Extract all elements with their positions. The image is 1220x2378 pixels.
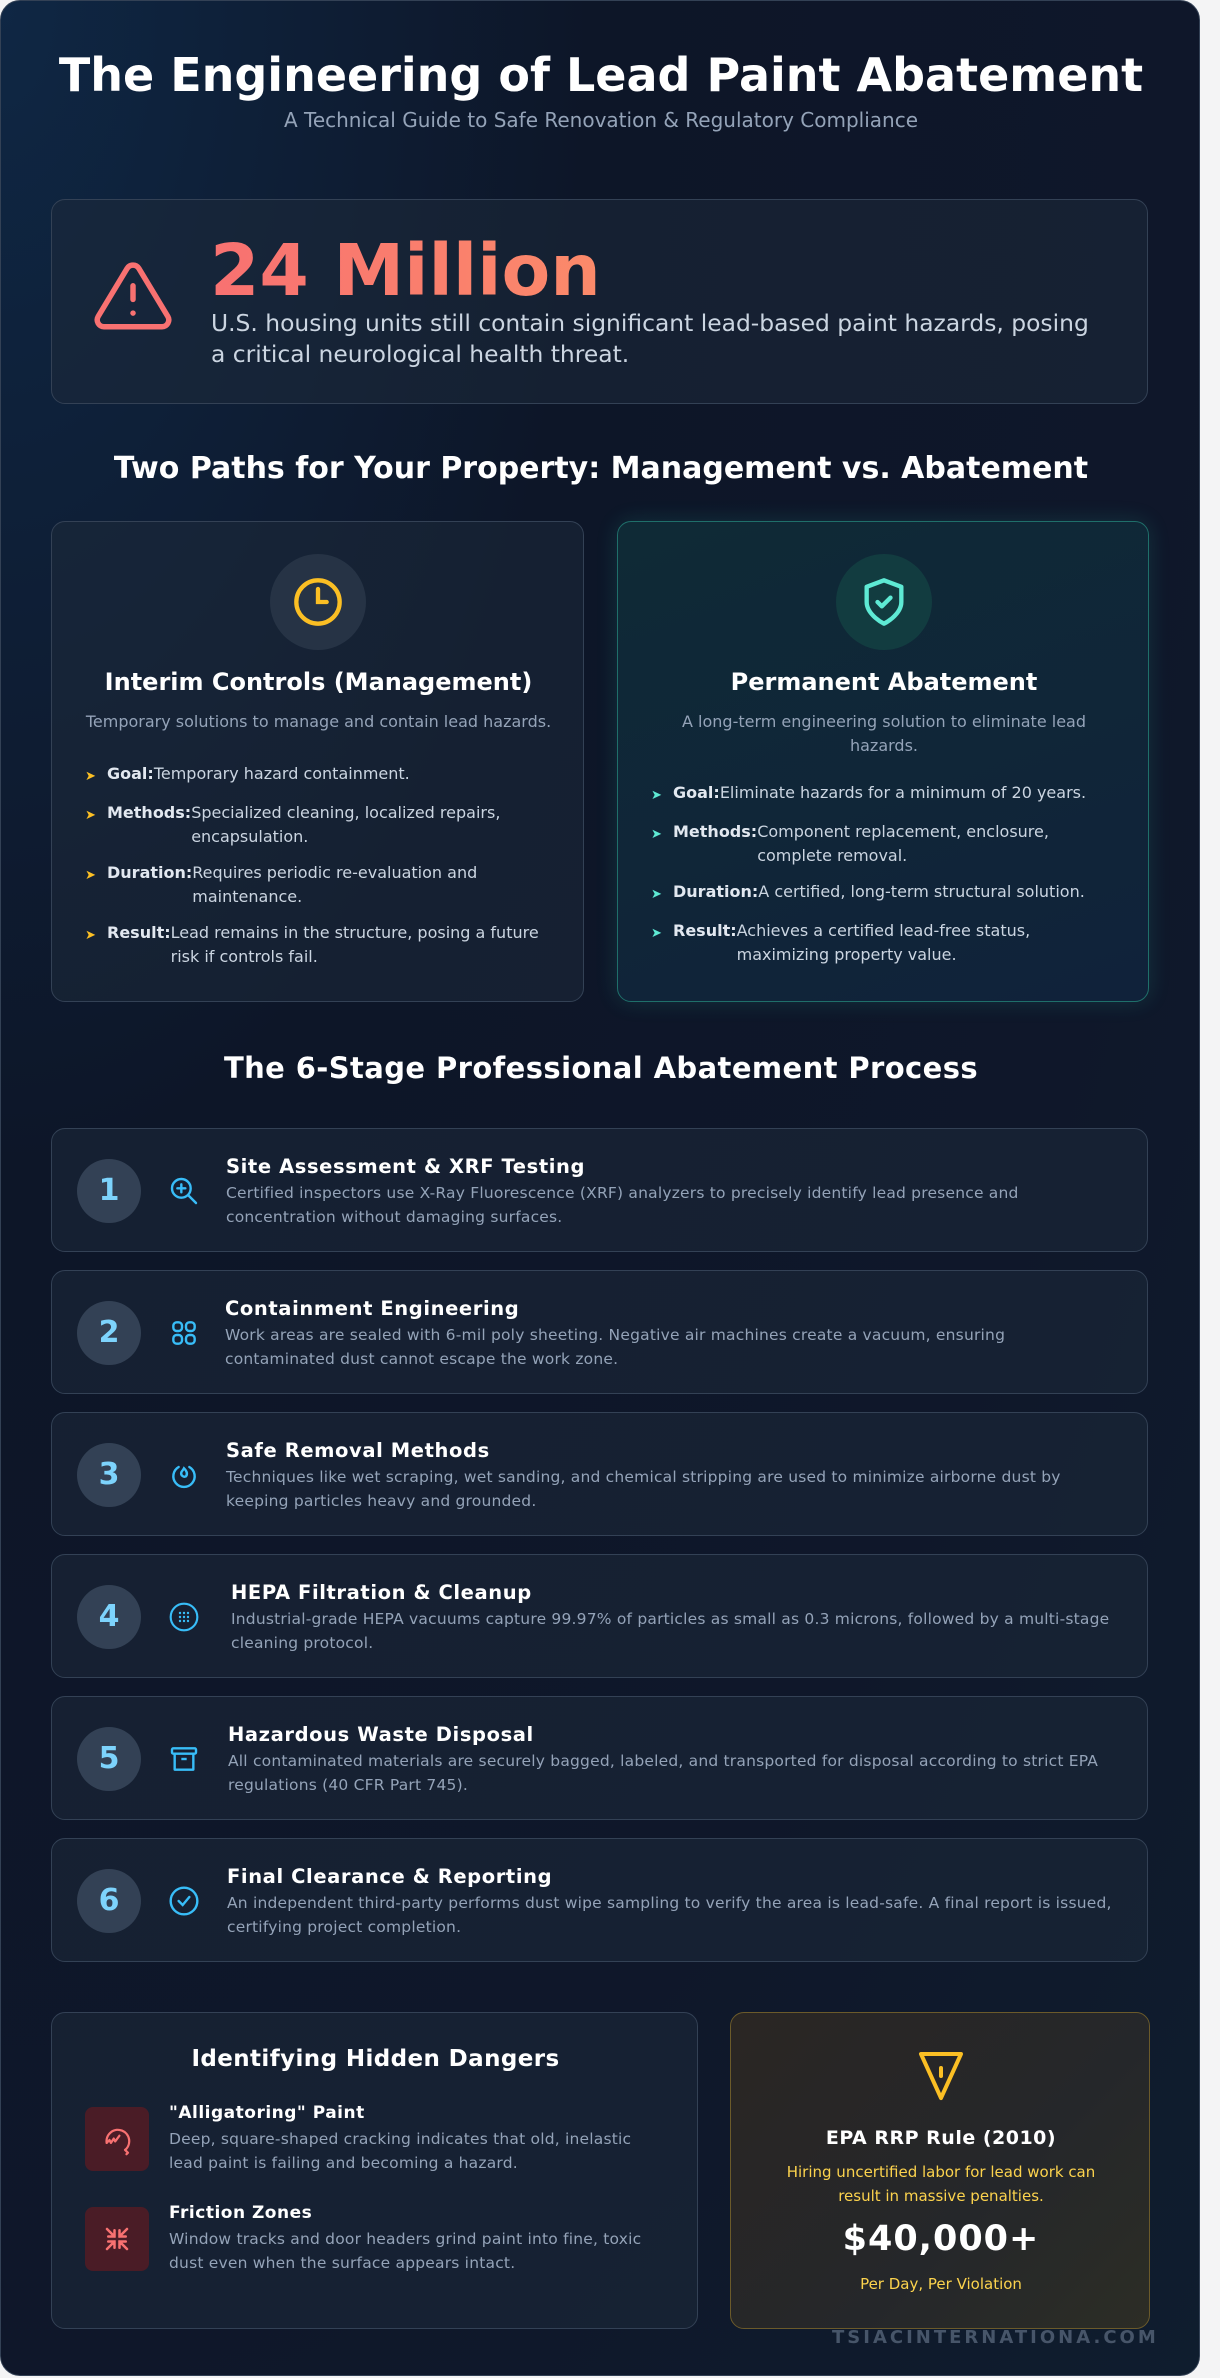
step 4	[51, 1554, 1148, 1678]
list: interim: Lead remains in the structure, posing a future risk if controls fail.	[171, 923, 539, 966]
title: The Engineering of Lead Paint Abatement	[59, 48, 1143, 102]
list: permanent: ➤	[651, 788, 662, 803]
panel: EPA RRP rule	[730, 2012, 1150, 2329]
item: friction zones	[85, 2203, 641, 2272]
penalty figure: $40,000+	[843, 2219, 1039, 2259]
icon: magnifier	[170, 1178, 198, 1204]
card title: Permanent Abatement	[731, 668, 1037, 696]
item: friction zones: Window tracks and door headers grind paint into fine, toxic dust even when the surface appears intact.	[169, 2230, 641, 2272]
icon: arrows in	[85, 2207, 149, 2271]
icon: bin	[170, 1747, 198, 1771]
step 5: Hazardous Waste Disposal	[228, 1723, 534, 1746]
panel: interim controls	[51, 521, 584, 1002]
list: interim: Temporary hazard containment.	[154, 764, 410, 783]
heading: 6-stage process: The 6-Stage Professional Abatement Process	[224, 1051, 978, 1085]
card subtitle: A long-term engineering solution to eliminate lead hazards.	[682, 712, 1086, 755]
list: interim: Methods:	[107, 803, 191, 822]
step 5: 5	[99, 1741, 119, 1776]
list: permanent: Component replacement, enclosure, complete removal.	[757, 822, 1049, 865]
list: permanent	[651, 783, 1086, 964]
step 1: Site Assessment & XRF Testing	[226, 1155, 585, 1178]
step 2: Containment Engineering	[225, 1297, 519, 1320]
list: interim: Duration:	[107, 863, 192, 882]
step 3: 3	[99, 1457, 119, 1492]
step 4: 4	[99, 1599, 119, 1634]
card title: Interim Controls (Management)	[105, 668, 532, 696]
item: alligatoring	[85, 2103, 631, 2172]
list: permanent: Result:	[673, 921, 737, 940]
panel: hidden dangers	[51, 2012, 698, 2329]
step 6: 6	[99, 1883, 119, 1918]
stat description	[211, 309, 1089, 368]
EPA description: Hiring uncertified labor for lead work can	[787, 2163, 1095, 2181]
step 3: Techniques like wet scraping, wet sanding, and chemical stripping are used to minimize airborne dust by keeping particles heavy and grounded.	[226, 1468, 1061, 1510]
step 1	[51, 1128, 1148, 1252]
heading: Identifying Hidden Dangers	[191, 2046, 560, 2072]
list: permanent: Methods:	[673, 822, 757, 841]
step 4: HEPA Filtration & Cleanup	[231, 1581, 532, 1604]
step 2	[51, 1270, 1148, 1394]
list: permanent: Eliminate hazards for a minimum of 20 years.	[720, 783, 1086, 802]
step 3: Safe Removal Methods	[226, 1439, 490, 1462]
step 3	[51, 1412, 1148, 1536]
item: friction zones: Friction Zones	[169, 2203, 312, 2223]
step 6: An independent third-party performs dust wipe sampling to verify the area is lead-safe. A final report is issued, certifying project completion.	[227, 1894, 1112, 1936]
heading: two paths: Two Paths for Your Property: Management vs. Abatement	[114, 451, 1088, 486]
penalty unit: Per Day, Per Violation	[860, 2275, 1022, 2293]
step 1: Certified inspectors use X-Ray Fluorescence (XRF) analyzers to precisely identify lead presence and concentration without damaging surfaces.	[226, 1184, 1019, 1226]
icon: shield	[836, 554, 932, 650]
icon: warning	[94, 262, 172, 330]
list: interim: ➤	[85, 769, 96, 784]
EPA title: EPA RRP Rule (2010)	[826, 2127, 1056, 2149]
step 6: Final Clearance & Reporting	[227, 1865, 552, 1888]
list: permanent: A certified, long-term structural solution.	[758, 882, 1085, 901]
icon: grid	[172, 1321, 196, 1345]
card subtitle: Temporary solutions to manage and contain lead hazards.	[86, 712, 551, 731]
list: permanent: Goal:	[673, 783, 720, 802]
icon: filter	[170, 1602, 198, 1632]
stat number: 24 Million	[210, 229, 601, 312]
list: permanent: ➤	[651, 887, 662, 902]
list: permanent: ➤	[651, 926, 662, 941]
list: interim: Specialized cleaning, localized repairs, encapsulation.	[191, 803, 500, 846]
list: permanent: ➤	[651, 827, 662, 842]
step 5: All contaminated materials are securely bagged, labeled, and transported for disposal according to strict EPA regulations (40 CFR Part 745).	[228, 1752, 1098, 1794]
icon: drop	[172, 1466, 196, 1488]
item: alligatoring: Deep, square-shaped cracking indicates that old, inelastic lead paint is failing and becoming a hazard.	[169, 2130, 631, 2172]
list: interim: ➤	[85, 868, 96, 883]
stat description: U.S. housing units still contain significant lead-based paint hazards, posing	[211, 309, 1089, 337]
list: interim: ➤	[85, 928, 96, 943]
list: interim	[85, 764, 539, 966]
list: interim: Result:	[107, 923, 171, 942]
stat description: a critical neurological health threat.	[211, 340, 629, 368]
EPA description: result in massive penalties.	[838, 2187, 1044, 2205]
step 2: Work areas are sealed with 6-mil poly sheeting. Negative air machines create a vacuum, ensuring contaminated dust cannot escape the work zone.	[225, 1326, 1005, 1368]
watermark: TSIACINTERNATIONA.COM	[832, 2327, 1159, 2348]
icon: warning triangle	[918, 2052, 963, 2100]
panel: stat	[51, 199, 1148, 404]
subtitle: A Technical Guide to Safe Renovation & Regulatory Compliance	[284, 108, 918, 132]
step 4: Industrial-grade HEPA vacuums capture 99.97% of particles as small as 0.3 microns, followed by a multi-stage cleaning protocol.	[231, 1610, 1109, 1652]
step 5	[51, 1696, 1148, 1820]
EPA description	[787, 2163, 1095, 2205]
icon: crack	[85, 2107, 149, 2171]
list: permanent: Achieves a certified lead-free status, maximizing property value.	[737, 921, 1030, 964]
icon: check	[170, 1886, 198, 1916]
list: interim: Requires periodic re-evaluation and maintenance.	[192, 863, 477, 906]
list: interim: Goal:	[107, 764, 154, 783]
step 2: 2	[99, 1315, 119, 1350]
panel: permanent abatement	[617, 521, 1149, 1002]
step 1: 1	[99, 1173, 119, 1208]
list: permanent: Duration:	[673, 882, 758, 901]
list: interim: ➤	[85, 808, 96, 823]
item: alligatoring: "Alligatoring" Paint	[169, 2103, 365, 2123]
step 6	[51, 1838, 1148, 1962]
icon: clock	[270, 554, 366, 650]
